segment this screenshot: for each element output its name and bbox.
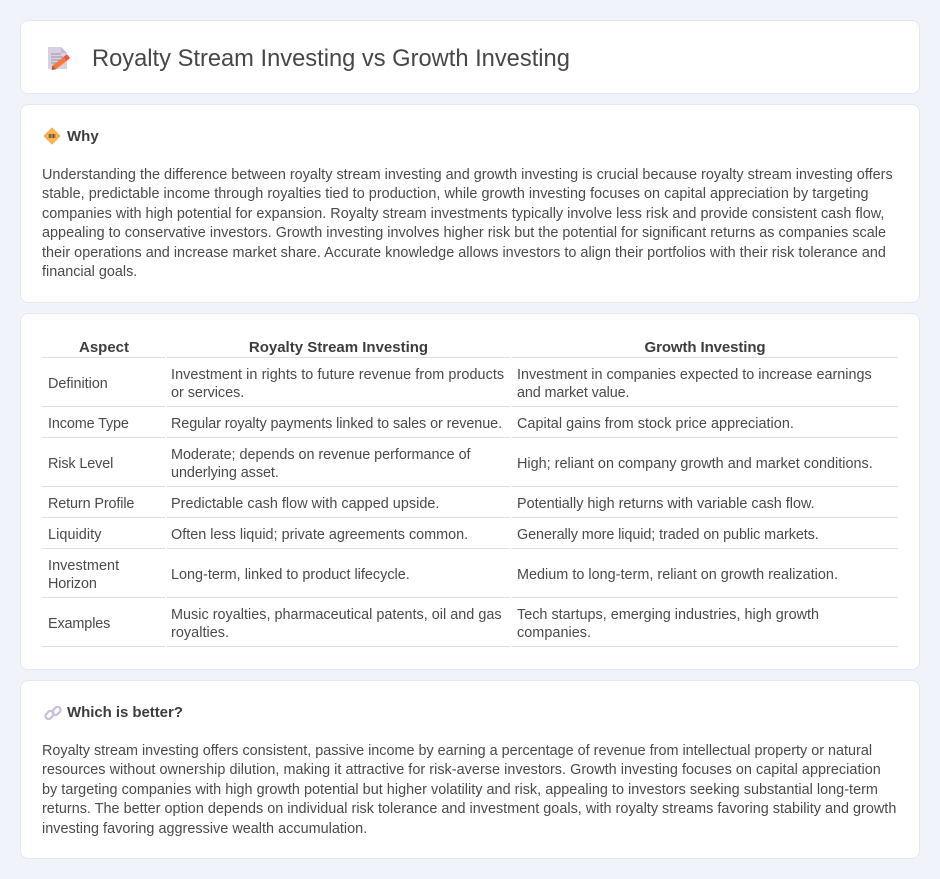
row: definition: or services. <box>171 385 244 401</box>
row: investment horizon: Long-term, linked to product lifecycle. <box>171 567 410 583</box>
panel: why <box>20 104 920 303</box>
row: liquidity: Often less liquid; private agreements common. <box>171 527 468 543</box>
row: income type <box>42 416 898 438</box>
row: examples: royalties. <box>171 625 229 641</box>
table header row: Growth Investing <box>645 339 765 356</box>
table header row: Royalty Stream Investing <box>249 339 428 356</box>
panel: comparison table <box>20 313 920 670</box>
row: definition: Investment in companies expected to increase earnings <box>517 367 872 383</box>
icon: diamond sign <box>44 128 60 144</box>
text: why paragraph: appealing to conservative investors. Growth investing involves higher risk but the potential for significant returns as companies scale <box>42 225 886 241</box>
text: why paragraph: stable, predictable income through royalties tied to production, while growth investing focuses on capital appreciation by targeting <box>42 186 869 202</box>
row: examples <box>42 607 898 647</box>
text: why paragraph: Understanding the difference between royalty stream investing and growth investing is crucial because royalty stream investing offers <box>42 167 893 183</box>
row: return profile <box>42 496 898 518</box>
text: why paragraph: their operations and increase market share. Accurate knowledge allows investors to align their portfolios with their risk tolerance and <box>42 245 886 261</box>
text: which is better paragraph: resources without ownership dilution, making it attractive for risk-averse investors. Growth investing focuses on capital appreciation <box>42 762 881 778</box>
row: definition: Definition <box>48 376 108 392</box>
row: investment horizon: Medium to long-term, reliant on growth realization. <box>517 567 838 583</box>
row: definition: Investment in rights to future revenue from products <box>171 367 504 383</box>
table header row: Aspect <box>79 339 129 356</box>
title: Royalty Stream Investing vs Growth Investing <box>92 46 570 72</box>
text: which is better paragraph: returns. The better option depends on individual risk tolerance and investment goals, with royalty streams favoring stability and growth <box>42 801 896 817</box>
row: examples: Examples <box>48 616 110 632</box>
row: definition: and market value. <box>517 385 629 401</box>
text: why paragraph: companies with high potential for expansion. Royalty stream investments typically involve less risk and provide consistent cash flow, <box>42 206 884 222</box>
row: liquidity <box>42 527 898 549</box>
icon: chain link <box>44 706 62 720</box>
row: return profile: Return Profile <box>48 496 134 512</box>
row: examples: Music royalties, pharmaceutical patents, oil and gas <box>171 607 502 623</box>
row: definition <box>42 367 898 407</box>
row: liquidity: Liquidity <box>48 527 102 543</box>
text: which is better paragraph: by targeting companies with high growth potential but higher volatility and risk, appealing to investors seeking substantial long-term <box>42 782 878 798</box>
row: return profile: Predictable cash flow with capped upside. <box>171 496 439 512</box>
table header row <box>42 339 898 358</box>
heading: why: Why <box>67 128 99 145</box>
row: investment horizon: Investment <box>48 558 119 574</box>
row: risk level: Risk Level <box>48 456 113 472</box>
row: risk level: High; reliant on company growth and market conditions. <box>517 456 873 472</box>
panel: which is better <box>20 680 920 859</box>
row: income type: Regular royalty payments linked to sales or revenue. <box>171 416 502 432</box>
text: which is better paragraph: investing favoring aggressive wealth accumulation. <box>42 821 367 837</box>
row: risk level: underlying asset. <box>171 465 279 481</box>
row: investment horizon: Horizon <box>48 576 97 592</box>
row: examples: companies. <box>517 625 591 641</box>
icon: document with pencil <box>48 47 70 70</box>
row: risk level <box>42 447 898 487</box>
row: investment horizon <box>42 558 898 598</box>
text: why paragraph <box>42 167 893 280</box>
row: return profile: Potentially high returns with variable cash flow. <box>517 496 815 512</box>
text: why paragraph: financial goals. <box>42 264 137 280</box>
panel: header <box>20 20 920 94</box>
row: liquidity: Generally more liquid; traded on public markets. <box>517 527 819 543</box>
heading: which is better: Which is better? <box>67 704 183 721</box>
text: which is better paragraph: Royalty stream investing offers consistent, passive income by earning a percentage of revenue from intellectual property or natural <box>42 743 872 759</box>
row: income type: Income Type <box>48 416 129 432</box>
row: risk level: Moderate; depends on revenue performance of <box>171 447 471 463</box>
text: which is better paragraph <box>42 743 896 837</box>
row: income type: Capital gains from stock price appreciation. <box>517 416 794 432</box>
row: examples: Tech startups, emerging industries, high growth <box>517 607 819 623</box>
